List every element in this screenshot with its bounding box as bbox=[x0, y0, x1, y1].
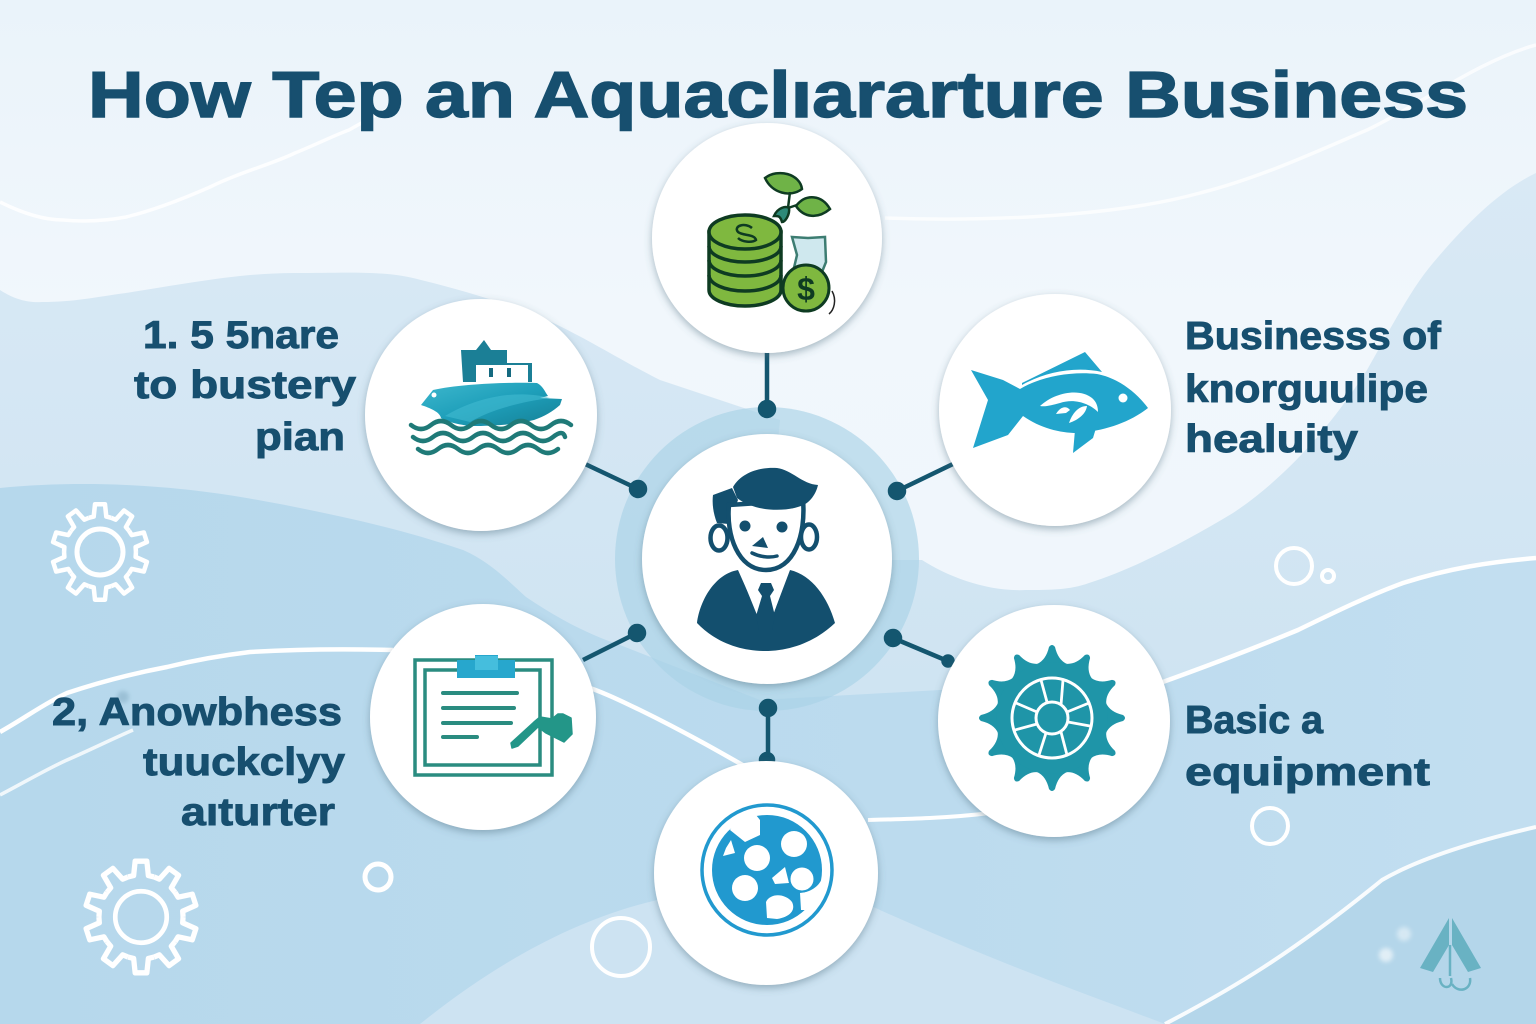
central ring bbox=[615, 407, 919, 711]
panel: person node bbox=[642, 434, 892, 684]
label: step two: tuuckclyy bbox=[143, 741, 345, 784]
label: basic equipment: Basic a bbox=[1185, 699, 1323, 742]
label: business knowledge bbox=[1185, 315, 1442, 461]
icon: clipboard bbox=[415, 655, 572, 775]
label: step two: aıturter bbox=[181, 791, 335, 834]
label: business knowledge: healuity bbox=[1185, 418, 1358, 461]
label: step one bbox=[134, 314, 356, 459]
icon: gear bbox=[979, 645, 1125, 791]
bubbles bbox=[365, 548, 1411, 976]
icon: waves bbox=[411, 421, 571, 453]
label: business knowledge: Businesss of bbox=[1185, 315, 1442, 358]
gear decoration: lower left bbox=[84, 861, 198, 973]
icon: petri disc bbox=[702, 805, 832, 935]
panel: money node bbox=[652, 123, 882, 353]
panel: boat node bbox=[365, 299, 597, 531]
label: step one: to bustery bbox=[134, 364, 356, 407]
icon: boat bbox=[421, 340, 562, 426]
panel: disc node bbox=[654, 761, 878, 985]
panel: gear node bbox=[938, 605, 1170, 837]
icon: sprout bbox=[765, 173, 830, 222]
panel: fish node bbox=[939, 294, 1171, 526]
icon: money bag: $ bbox=[797, 271, 815, 307]
icon: coin stack bbox=[709, 232, 781, 306]
label: basic equipment bbox=[1185, 699, 1430, 794]
logo mark bbox=[1420, 918, 1481, 990]
panel: clipboard node bbox=[370, 604, 596, 830]
label: step two bbox=[52, 691, 345, 834]
label: step one: pian bbox=[255, 416, 345, 459]
icon: money bag bbox=[783, 237, 835, 314]
gear decoration: upper left bbox=[51, 504, 149, 600]
label: basic equipment: equipment bbox=[1185, 751, 1430, 794]
icon: fish bbox=[971, 352, 1148, 453]
connectors bbox=[583, 352, 955, 766]
title: How Tep an Aquaclıararture Business bbox=[88, 58, 1468, 131]
label: step two: 2, Anowbhess bbox=[52, 691, 342, 734]
label: step one: 1. 5 5nare bbox=[143, 314, 339, 357]
icon: pen bbox=[511, 714, 572, 748]
icon: person bbox=[697, 468, 835, 651]
label: business knowledge: knorguulipe bbox=[1185, 368, 1428, 411]
